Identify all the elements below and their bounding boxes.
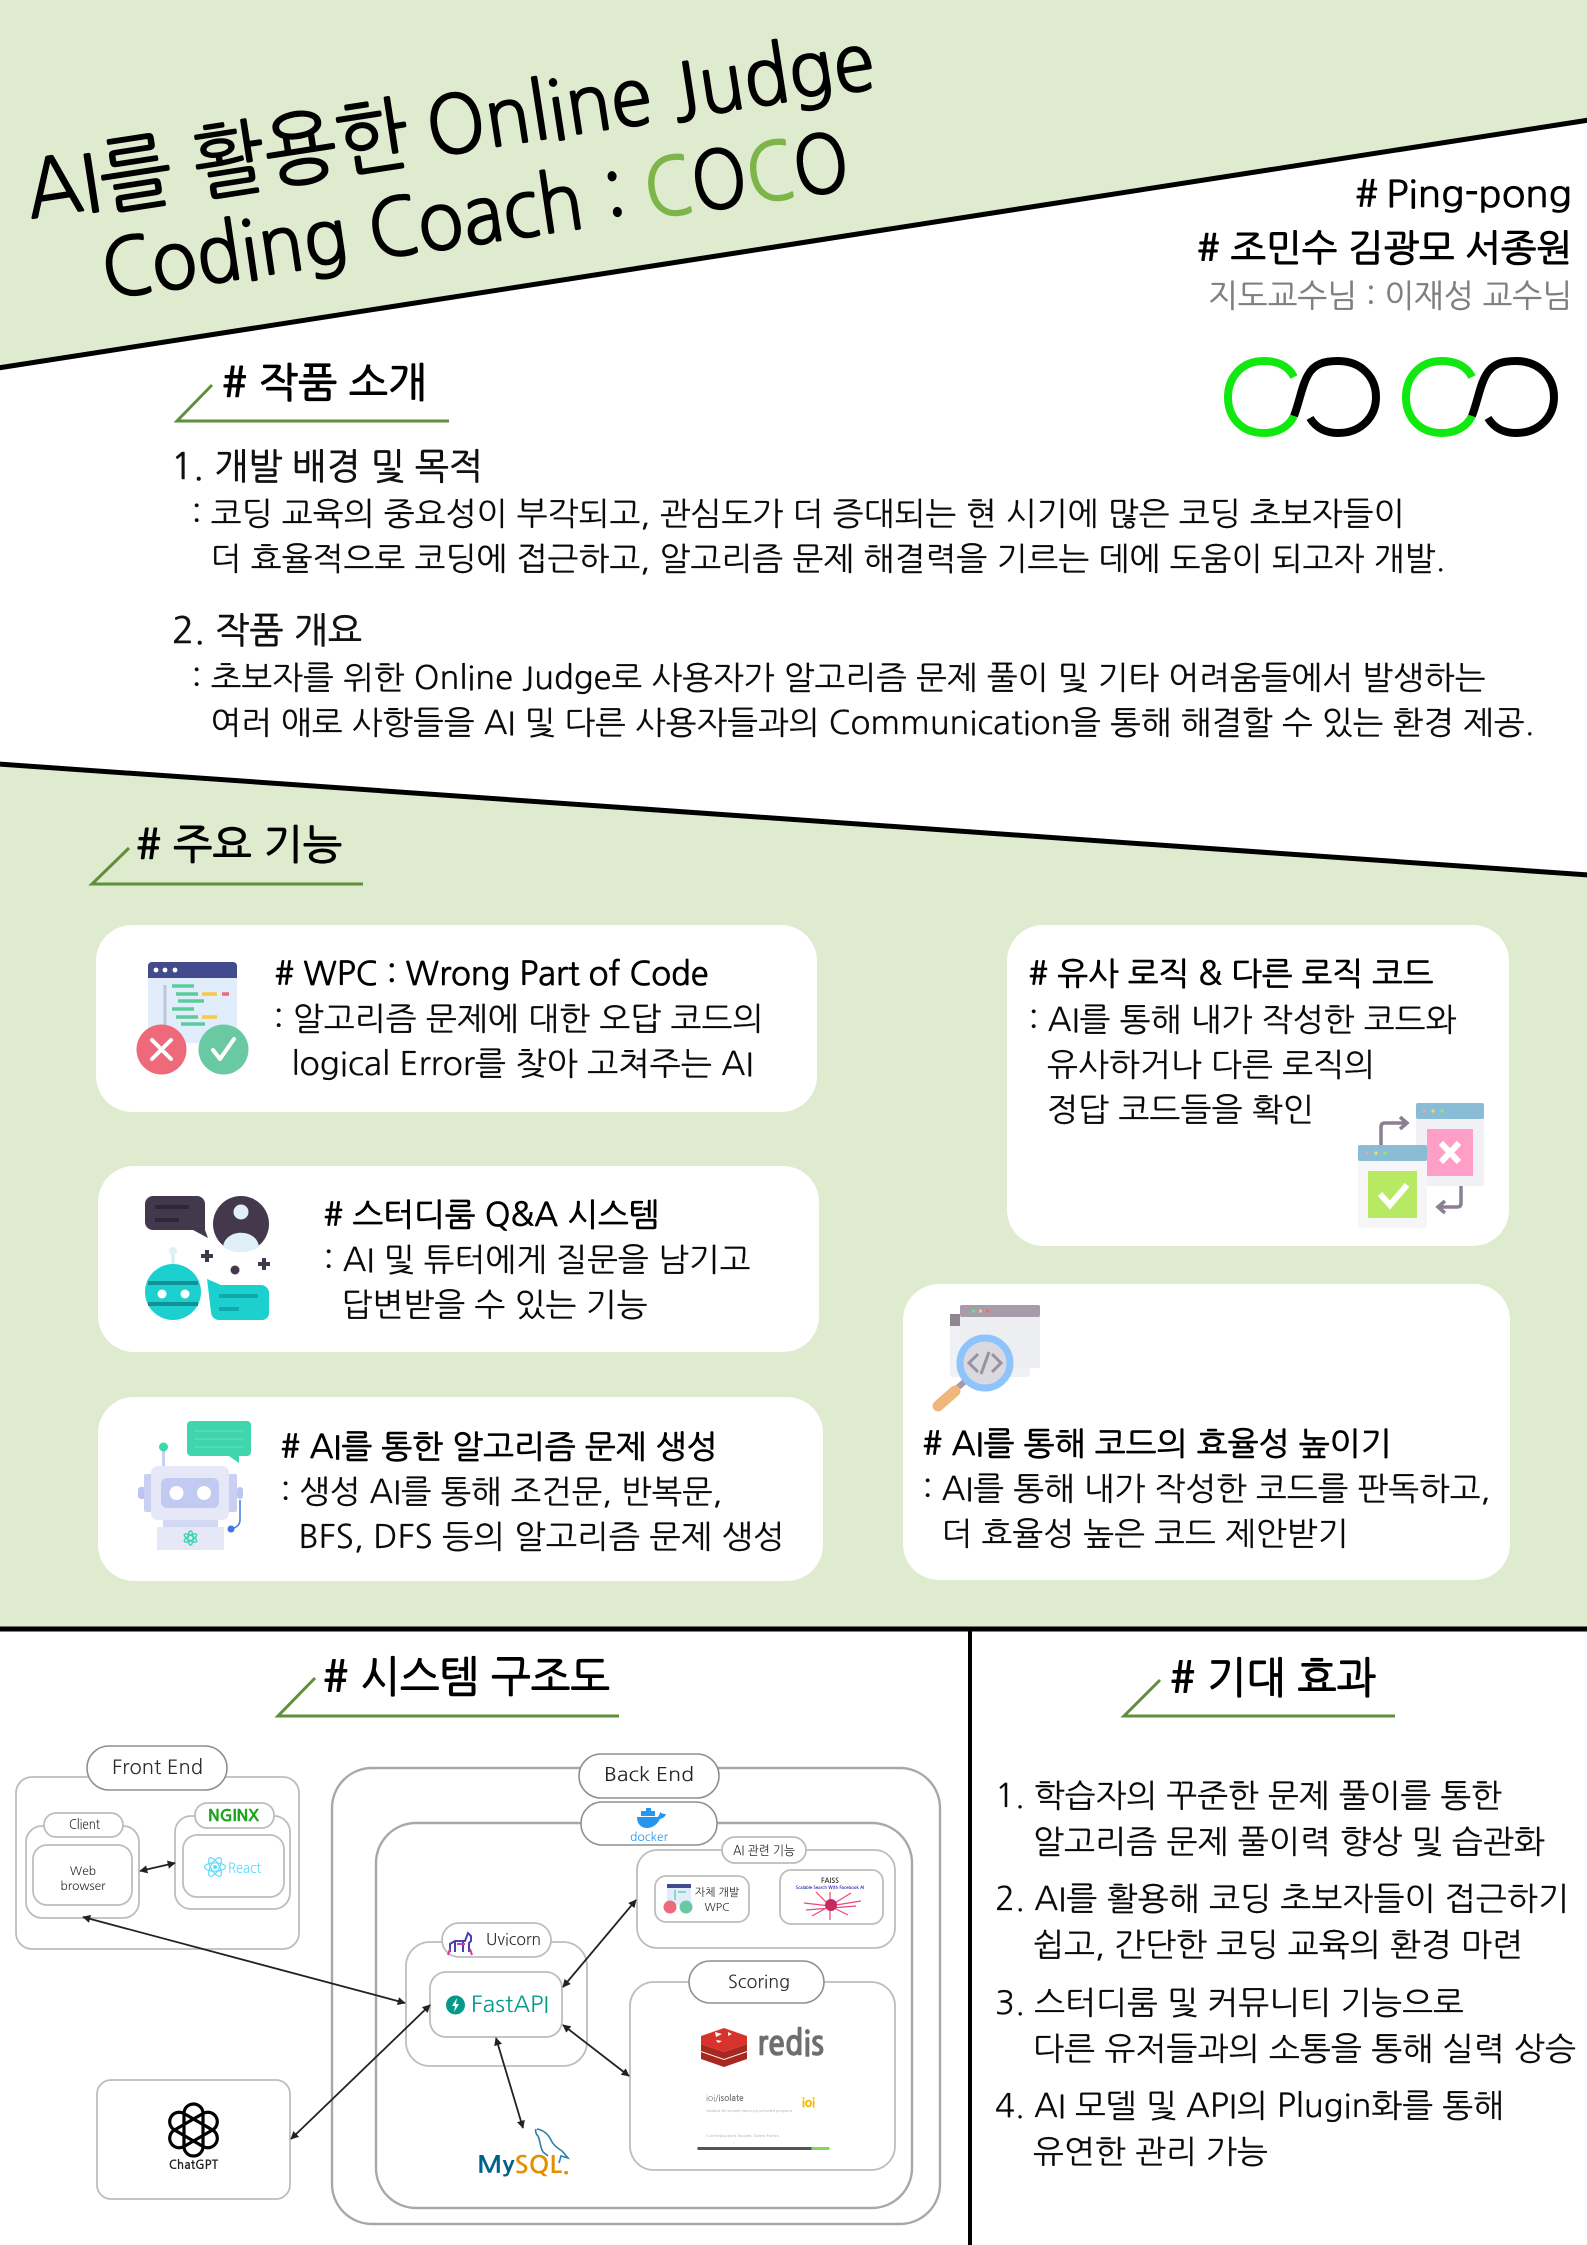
text block: 기대 효과 list: 4. AI 모델 및 API의 Plugin화를 통해 — [995, 2090, 1504, 2122]
team info — [1197, 176, 1572, 312]
text: 문제 생성 description: : 생성 AI를 통해 조건문, 반복문, — [280, 1476, 722, 1508]
title: Coding Coach — [96, 161, 589, 311]
text: Q&A description: : AI 및 튜터에게 질문을 남기고 — [324, 1244, 750, 1276]
text: 문제 생성 description: # AI를 통한 알고리즘 문제 생성 — [280, 1431, 718, 1463]
text: Q&A description: 답변받을 수 있는 기능 — [342, 1289, 648, 1321]
panel: Front End: Client — [69, 1818, 100, 1831]
panel: Front End — [16, 1746, 299, 1949]
icon: chat robot — [138, 1421, 251, 1550]
panel: features background — [0, 764, 1587, 1629]
heading: 작품 소개 — [177, 362, 449, 421]
panel: AI 관련 기능 — [637, 1837, 895, 1948]
icon: COCO logo — [1228, 361, 1554, 433]
system diagram — [16, 1746, 940, 2224]
text block: 기대 효과 list — [995, 1780, 1576, 2168]
heading: 기대 효과: # 기대 효과 — [1170, 1657, 1376, 1700]
text: 효율성 description: : AI를 통해 내가 작성한 코드를 판독하고, — [922, 1473, 1490, 1505]
panel: Front End: Web — [70, 1865, 96, 1877]
panel: AI 관련 기능: AI 관련 기능 — [733, 1844, 795, 1857]
panel: 스터디룸 Q&A 시스템 — [98, 1166, 819, 1352]
text block: 기대 효과 list: 유연한 관리 가능 — [1033, 2136, 1268, 2168]
title: AI를 활용한 — [20, 93, 414, 231]
text: Q&A description — [324, 1199, 750, 1321]
panel: Scoring: ioi/isolate — [706, 2094, 744, 2103]
panel: Scoring: Scoring — [728, 1973, 790, 1991]
heading: 시스템 구조도 — [278, 1656, 619, 1716]
text: 유사 로직 description: 유사하거나 다른 로직의 — [1047, 1049, 1375, 1081]
panel: Uvicorn FastAPI: Uvicorn — [486, 1932, 541, 1948]
icon: tutor and robot chat — [145, 1196, 270, 1320]
heading: 시스템 구조도: # 시스템 구조도 — [323, 1656, 610, 1699]
panel: AI 관련 기능: 자체 개발 — [695, 1886, 740, 1898]
text: 효율성 description: 더 효율성 높은 코드 제안받기 — [942, 1518, 1348, 1550]
panel: ChatGPT — [97, 2080, 290, 2199]
panel: title banner background — [0, 0, 1587, 368]
panel: 유사 로직 & 다른 로직 코드 — [1007, 925, 1509, 1246]
panel: AI 관련 기능: FAISS — [821, 1878, 839, 1885]
panel: AI 관련 기능: WPC — [704, 1902, 730, 1913]
heading: 기대 효과 — [1124, 1657, 1395, 1716]
panel: Scoring: ioi — [802, 2097, 815, 2109]
panel: Scoring: Sandbox for securely executing untrusted programs — [706, 2109, 792, 2113]
text: 효율성 description: # AI를 통해 코드의 효율성 높이기 — [922, 1428, 1392, 1460]
text: WPC description: # WPC : Wrong Part of Code — [274, 958, 708, 990]
text: 유사 로직 description: 정답 코드들을 확인 — [1047, 1094, 1314, 1126]
panel: Front End: React — [228, 1862, 262, 1876]
panel: WPC — [96, 925, 817, 1112]
panel: Uvicorn FastAPI: FastAPI — [471, 1994, 549, 2016]
text: WPC description — [274, 958, 764, 1080]
text block: 작품 개요 — [172, 613, 1534, 739]
panel: Back End — [332, 1754, 940, 2224]
text block: 기대 효과 list: 1. 학습자의 꾸준한 문제 풀이를 통한 — [995, 1780, 1502, 1812]
text block: 작품 개요: 여러 애로 사항들을 AI 및 다른 사용자들과의 Communication을 통해 해결할 수 있는 환경 제공. — [210, 707, 1534, 739]
text: 효율성 description — [922, 1428, 1490, 1550]
panel: Scoring — [630, 1961, 895, 2170]
icon: compare code windows — [1358, 1103, 1484, 1228]
text: WPC description: logical Error를 찾아 고쳐주는 AI — [292, 1048, 754, 1080]
text: Q&A description: # 스터디룸 Q&A 시스템 — [324, 1199, 660, 1231]
text block: 기대 효과 list: 쉽고, 간단한 코딩 교육의 환경 마련 — [1033, 1929, 1523, 1961]
text block: 기대 효과 list: 2. AI를 활용해 코딩 초보자들이 접근하기 — [995, 1883, 1569, 1915]
heading: 주요 기능: # 주요 기능 — [136, 824, 342, 865]
title: Online Judge — [421, 21, 880, 169]
panel: Uvicorn FastAPI — [406, 1923, 587, 2066]
text block: 기대 효과 list: 3. 스터디룸 및 커뮤니티 기능으로 — [995, 1987, 1464, 2019]
title — [20, 21, 880, 311]
text block: 개발 배경 및 목적 — [171, 449, 1446, 575]
text block: 작품 개요: : 초보자를 위한 Online Judge로 사용자가 알고리즘 문제 풀이 및 기타 어려움들에서 발생하는 — [192, 662, 1486, 694]
panel: Scoring: redis — [757, 2027, 824, 2061]
icon: docker pill — [581, 1802, 717, 1845]
text block: 기대 효과 list: 알고리즘 문제 풀이력 향상 및 습관화 — [1033, 1826, 1545, 1858]
team info: # Ping-pong — [1355, 176, 1572, 213]
panel: Scoring: Contributors Issues Stars Forks — [706, 2134, 780, 2138]
heading: 작품 소개: # 작품 소개 — [222, 362, 427, 403]
panel: Front End: NGINX — [208, 1809, 259, 1824]
panel: Front End: browser — [60, 1880, 106, 1892]
text: 문제 생성 description: BFS, DFS 등의 알고리즘 문제 생성 — [298, 1521, 784, 1553]
text block: 개발 배경 및 목적: 더 효율적으로 코딩에 접근하고, 알고리즘 문제 해결력을 기르는 데에 도움이 되고자 개발. — [210, 543, 1446, 575]
panel: Front End: Front End — [112, 1757, 203, 1777]
panel: AI 관련 기능: Scalable Search With Facebook AI — [796, 1885, 864, 1890]
text: 유사 로직 description: : AI를 통해 내가 작성한 코드와 — [1028, 1004, 1456, 1036]
text: WPC description: : 알고리즘 문제에 대한 오답 코드의 — [274, 1003, 764, 1035]
text block: 개발 배경 및 목적: 1. 개발 배경 및 목적 — [171, 449, 483, 485]
heading: 주요 기능 — [92, 824, 363, 884]
panel: Back End: Back End — [604, 1765, 694, 1784]
text: 유사 로직 description: # 유사 로직 & 다른 로직 코드 — [1028, 958, 1434, 990]
icon: MySQL logo: MySQL. — [477, 2153, 570, 2177]
text block: 개발 배경 및 목적: : 코딩 교육의 중요성이 부각되고, 관심도가 더 증대되는 현 시기에 많은 코딩 초보자들이 — [192, 498, 1404, 530]
icon: MySQL logo — [477, 2129, 570, 2177]
panel: 코드 효율성 높이기 — [903, 1284, 1510, 1580]
panel: AI 문제 생성 — [98, 1397, 823, 1581]
text block: 기대 효과 list: 다른 유저들과의 소통을 통해 실력 상승 — [1033, 2033, 1576, 2065]
team info: # 조민수 김광모 서종원 — [1197, 230, 1572, 267]
text: 유사 로직 description — [1028, 958, 1456, 1126]
text: 문제 생성 description — [280, 1431, 784, 1553]
team info: 지도교수님 : 이재성 교수님 — [1208, 280, 1572, 312]
title: : COCO — [598, 122, 854, 237]
icon: docker pill: docker — [630, 1831, 669, 1843]
panel: ChatGPT: ChatGPT — [169, 2159, 219, 2171]
arrows: diagram connections — [83, 1863, 636, 2139]
icon: code window with cross and check — [136, 962, 248, 1074]
text block: 작품 개요: 2. 작품 개요 — [172, 613, 362, 649]
icon: magnifier over code window — [938, 1305, 1040, 1406]
